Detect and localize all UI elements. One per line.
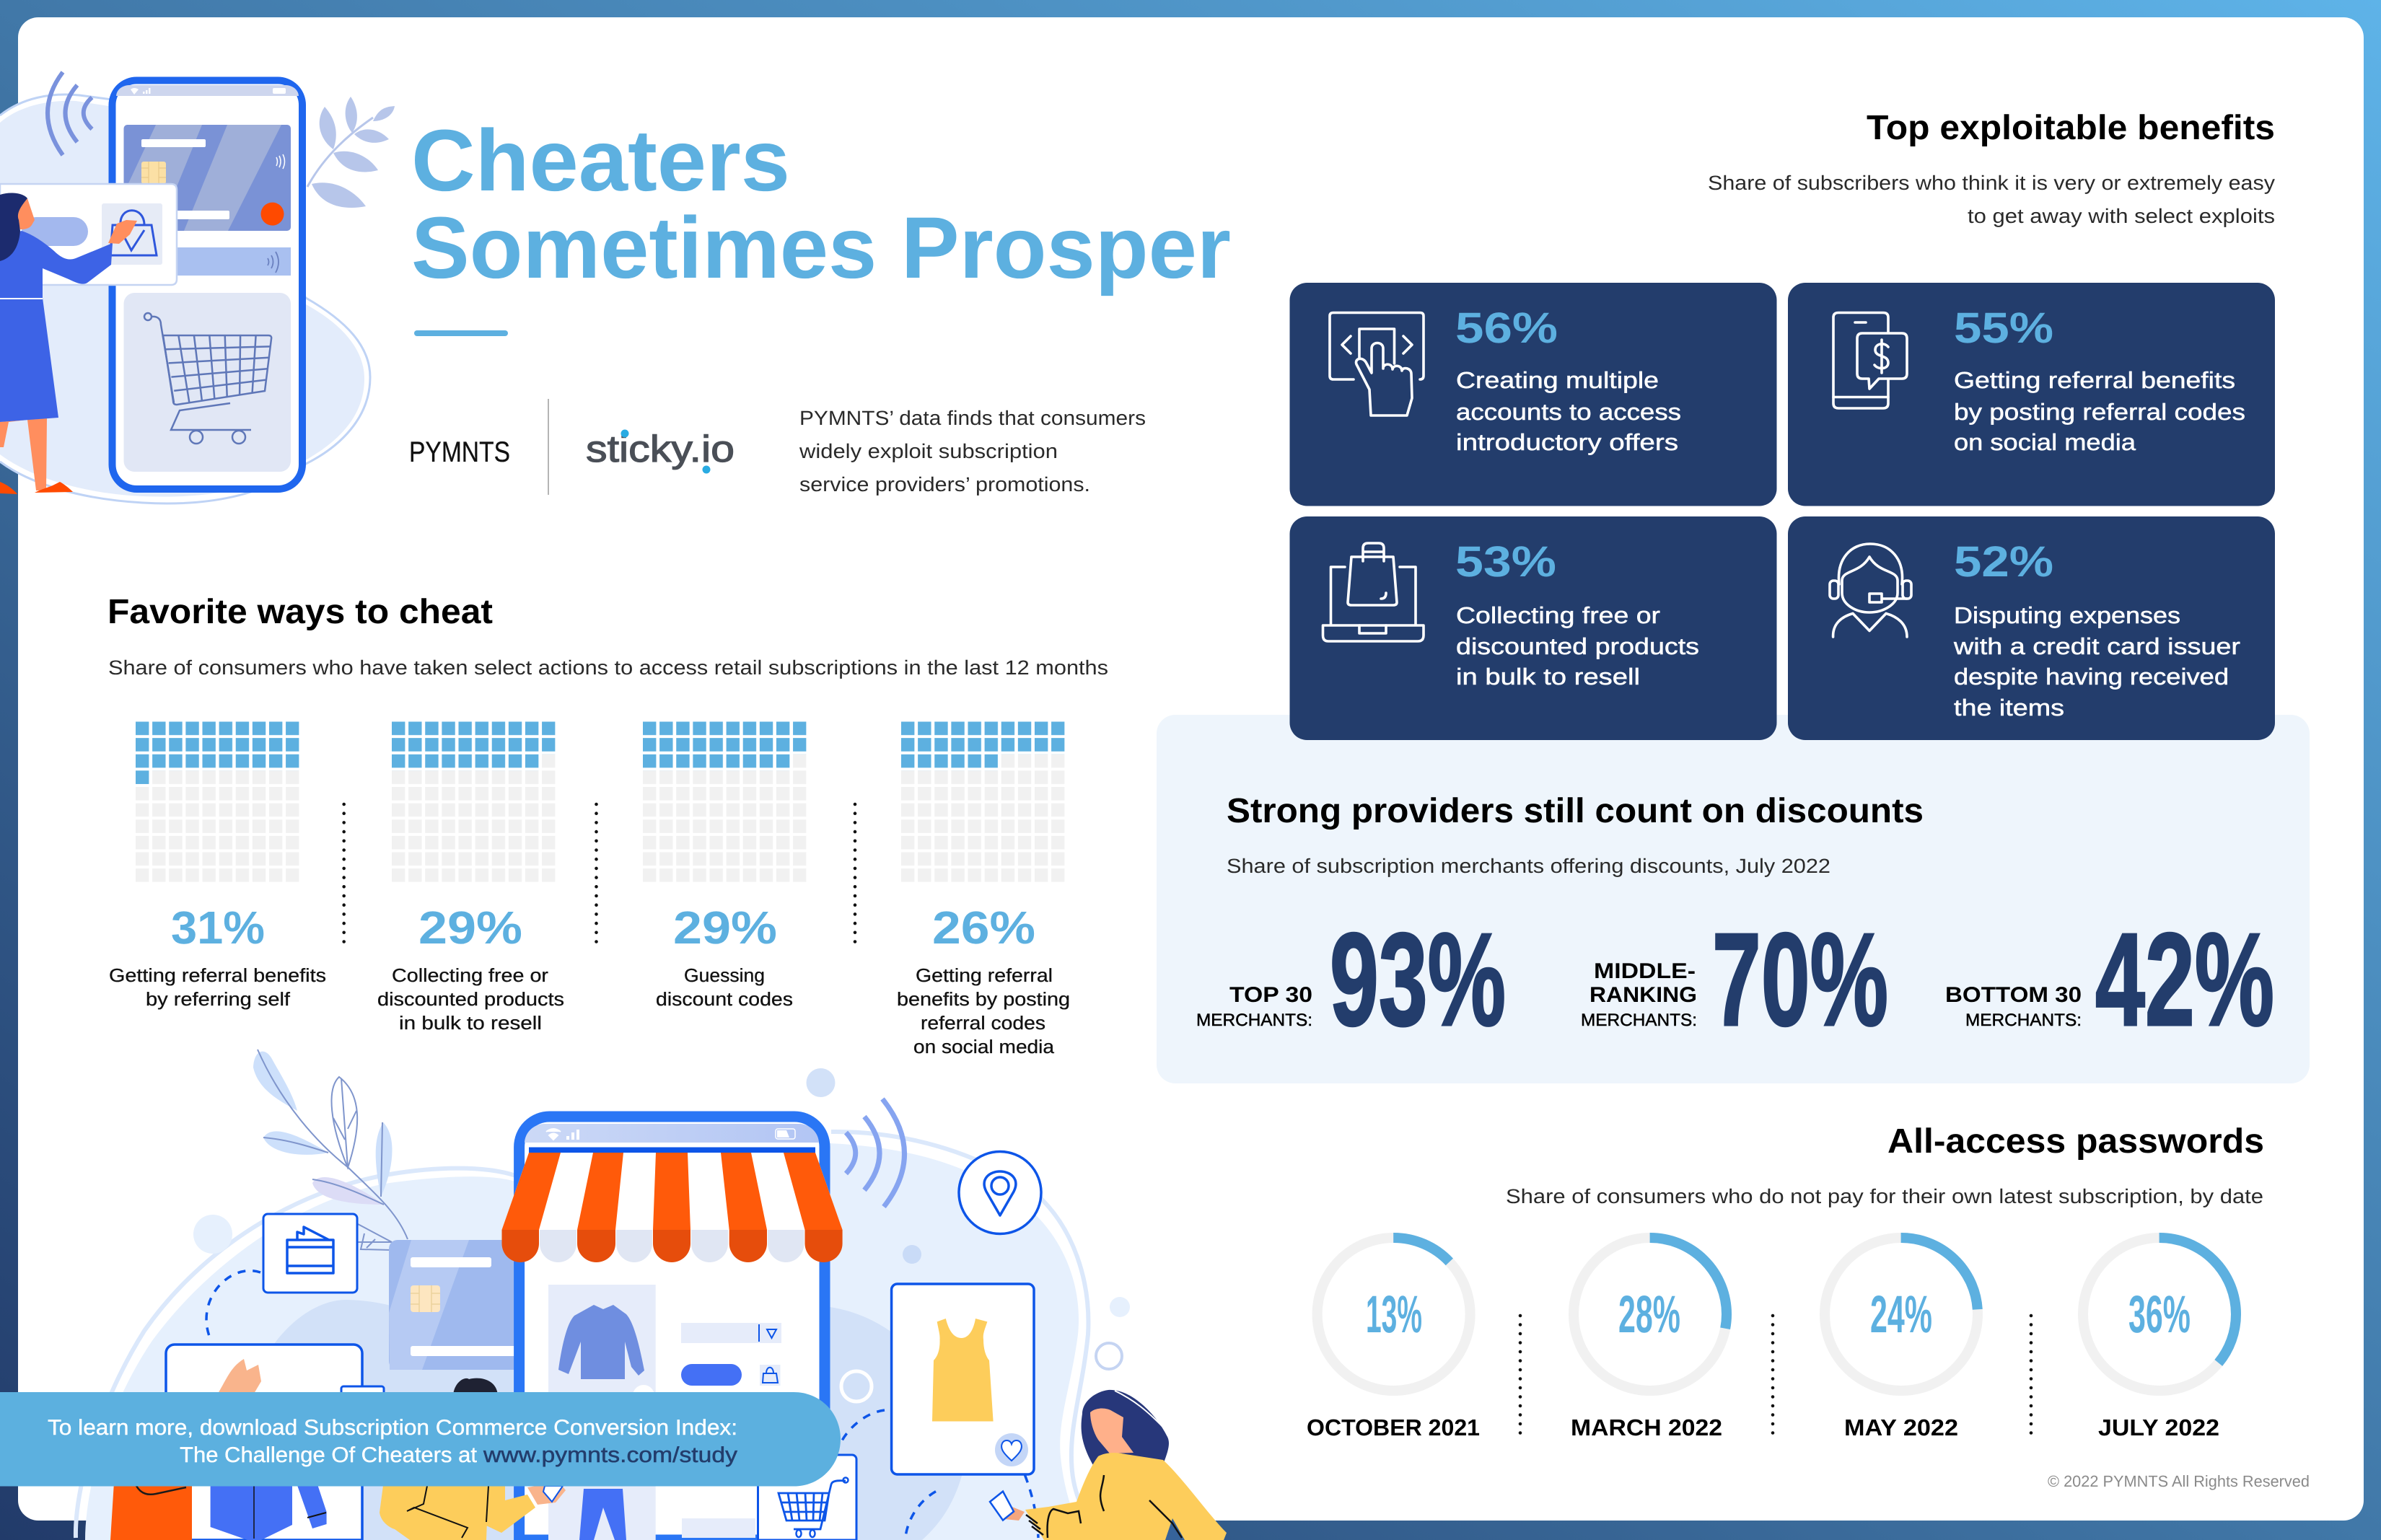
waffle chart: 31% <box>136 721 299 882</box>
intro paragraph <box>799 407 1146 496</box>
donut: october 2021 <box>1307 1238 1480 1440</box>
donut: march 2022: MARCH 2022 <box>1571 1414 1722 1440</box>
label: posting referral codes: referral codes <box>921 1012 1045 1034</box>
stat: top 30 merchants: 93% <box>1330 905 1506 1053</box>
stat: bottom 30 merchants: BOTTOM 30 <box>1945 983 2082 1007</box>
decorative bubbles <box>193 1068 1130 1402</box>
credit card <box>124 125 291 231</box>
description: despite having received <box>1954 664 2229 690</box>
buy button and bag <box>681 1364 781 1386</box>
title underline <box>414 330 508 336</box>
stat: bottom 30 merchants <box>1945 905 2274 1053</box>
description: discounted products <box>1456 633 1699 659</box>
donut: july 2022: JULY 2022 <box>2098 1414 2219 1440</box>
waffle chart: 29% guessing <box>643 721 807 882</box>
stat: 56%: 56% <box>1455 304 1558 352</box>
wireless waves <box>48 72 92 155</box>
dropdown <box>681 1323 781 1343</box>
stat: top 30 merchants: TOP 30 <box>1229 983 1312 1007</box>
description: introductory offers <box>1456 429 1678 455</box>
subheading: favorite ways to cheat: Share of consumers who have taken select actions to access retail subscriptions in the last 12 months <box>108 656 1108 679</box>
storefront illustration <box>76 1050 1227 1540</box>
donut: july 2022: 36% <box>2128 1285 2191 1344</box>
label: collecting free products: in bulk to resell <box>399 1012 542 1034</box>
stat: middle-ranking merchants <box>1581 905 1888 1053</box>
subheading: top exploitable benefits: to get away with select exploits <box>1968 205 2275 227</box>
heading: top exploitable benefits: Top exploitable benefits <box>1867 109 2275 147</box>
stat: 53%: 53% <box>1455 537 1556 586</box>
leaf sprig <box>307 97 395 208</box>
heading: all-access passwords: All-access passwords <box>1887 1122 2264 1161</box>
panel: strong providers <box>1157 715 2310 1083</box>
subheading: top exploitable benefits <box>1708 172 2275 227</box>
donut: october 2021: OCTOBER 2021 <box>1307 1414 1480 1440</box>
donut: may 2022: 24% <box>1870 1285 1932 1344</box>
background blob <box>0 94 370 503</box>
stat: middle-ranking merchants: 70% <box>1712 905 1888 1053</box>
label: referring self: by referring self <box>146 988 291 1010</box>
status bar <box>525 1124 819 1143</box>
label: collecting free products <box>377 964 564 1034</box>
stat: 52%: 52% <box>1954 537 2053 586</box>
label: posting referral codes: on social media <box>913 1036 1055 1057</box>
icon: laptop with shopping bag <box>1323 543 1424 641</box>
icon: hand on touchscreen <box>1330 313 1424 415</box>
phone storefront <box>519 1117 825 1540</box>
intro paragraph: widely exploit subscription <box>799 440 1058 462</box>
card: disputing expenses <box>1788 516 2275 740</box>
stat: middle-ranking merchants: RANKING <box>1589 983 1697 1007</box>
description: with a credit card issuer <box>1953 633 2240 659</box>
banner link: www.pymnts.com/study <box>483 1443 737 1467</box>
icon: phone with dollar bubble <box>1833 313 1907 408</box>
copyright: © 2022 PYMNTS All Rights Reserved <box>2048 1472 2310 1490</box>
background blobs <box>76 1132 1098 1540</box>
card: referral benefits on social media <box>1788 283 2275 506</box>
product panel: sweater <box>548 1285 656 1540</box>
title: Sometimes Prosper <box>411 198 1231 296</box>
donut: march 2022 <box>1571 1238 1727 1440</box>
label: referring self: Getting referral benefits <box>109 964 326 986</box>
donut: july 2022 <box>2083 1238 2236 1440</box>
card: collecting free products <box>1290 516 1776 740</box>
stat: 29%: 29% <box>418 902 522 954</box>
label: posting referral codes <box>897 964 1070 1057</box>
intro paragraph: service providers’ promotions. <box>799 473 1090 496</box>
label: guessing discount codes: Guessing <box>684 964 765 986</box>
product card: tank top <box>892 1284 1034 1474</box>
logos <box>409 399 735 495</box>
stat: top 30 merchants <box>1196 905 1506 1053</box>
hero illustration: phone, card and shopper <box>0 72 395 503</box>
waffle chart: 29% collecting <box>392 721 556 882</box>
title: Cheaters <box>411 111 790 209</box>
label: collecting free products: Collecting free or <box>392 964 548 986</box>
stat: middle-ranking merchants: MERCHANTS: <box>1581 1011 1697 1030</box>
contactless band <box>177 247 291 276</box>
stat: 26%: 26% <box>932 902 1035 954</box>
subheading: top exploitable benefits: Share of subscribers who think it is very or extremely easy <box>1708 172 2275 194</box>
stat: middle-ranking merchants: MIDDLE- <box>1594 959 1696 983</box>
stat: bottom 30 merchants: 42% <box>2095 905 2274 1053</box>
stat: top 30 merchants: MERCHANTS: <box>1196 1011 1312 1030</box>
description <box>1954 367 2245 455</box>
credit card <box>389 1240 533 1370</box>
description: the items <box>1954 695 2064 721</box>
intro paragraph: PYMNTS’ data finds that consumers <box>799 407 1146 429</box>
label: collecting free products: discounted products <box>377 988 564 1010</box>
description: by posting referral codes <box>1954 399 2245 425</box>
donut: may 2022 <box>1825 1238 1978 1440</box>
woman shopper <box>0 193 137 494</box>
description <box>1456 602 1699 690</box>
call to action banner <box>0 1392 841 1486</box>
stat: 29%: 29% <box>673 902 777 954</box>
dashed connectors <box>206 1271 1038 1538</box>
description: accounts to access <box>1456 399 1681 425</box>
description: Getting referral benefits <box>1954 367 2235 393</box>
card: creating multiple accounts <box>1290 283 1776 506</box>
wireless waves <box>846 1099 905 1207</box>
banner line one: To learn more, download Subscription Commerce Conversion Index: <box>48 1416 737 1440</box>
wallet box <box>263 1214 357 1293</box>
banner line two: The Challenge Of Cheaters at <box>180 1443 478 1467</box>
subheading: all-access passwords: Share of consumers who do not pay for their own latest subscription, by date <box>1506 1185 2263 1207</box>
subheading: strong providers: Share of subscription merchants offering discounts, July 2022 <box>1227 855 1830 877</box>
label: referring self <box>109 964 326 1010</box>
seated shopper in yellow <box>380 1378 566 1540</box>
description: Creating multiple <box>1456 367 1659 393</box>
title <box>411 111 1231 296</box>
plant sprig <box>253 1050 408 1250</box>
logo divider <box>548 399 549 495</box>
heading: strong providers: Strong providers still count on discounts <box>1227 792 1924 830</box>
laptop card with shopper <box>110 1345 384 1540</box>
stat: bottom 30 merchants: MERCHANTS: <box>1965 1011 2082 1030</box>
label: guessing discount codes <box>656 964 793 1010</box>
heading: favorite ways to cheat: Favorite ways to cheat <box>108 593 493 631</box>
status icons <box>131 88 286 94</box>
standing woman with phone <box>990 1390 1227 1540</box>
PYMNTS logo: PYMNTS <box>409 436 510 468</box>
awning <box>502 1147 843 1262</box>
label: posting referral codes: benefits by posting <box>897 988 1070 1010</box>
cart panel <box>124 293 291 472</box>
shopping cart <box>144 313 271 444</box>
stat: 55%: 55% <box>1954 304 2053 352</box>
description <box>1953 602 2240 721</box>
phone <box>113 81 302 489</box>
location pin <box>959 1151 1041 1233</box>
description: on social media <box>1954 429 2136 455</box>
description <box>1456 367 1681 455</box>
donut: may 2022: MAY 2022 <box>1844 1414 1958 1440</box>
description: Collecting free or <box>1456 602 1660 628</box>
label: guessing discount codes: discount codes <box>656 988 793 1010</box>
stat: 31%: 31% <box>171 902 265 954</box>
overlay card with bag <box>0 184 177 285</box>
mini cart card <box>758 1455 856 1540</box>
description: Disputing expenses <box>1954 602 2180 628</box>
donut: march 2022: 28% <box>1618 1285 1680 1344</box>
description: in bulk to resell <box>1456 664 1640 690</box>
waffle chart: 26% <box>901 721 1065 882</box>
donut: october 2021: 13% <box>1366 1285 1422 1344</box>
icon: headset agent <box>1830 544 1911 637</box>
label: posting referral codes: Getting referral <box>916 964 1053 986</box>
sticky.io logo: sticky.io <box>586 428 735 470</box>
